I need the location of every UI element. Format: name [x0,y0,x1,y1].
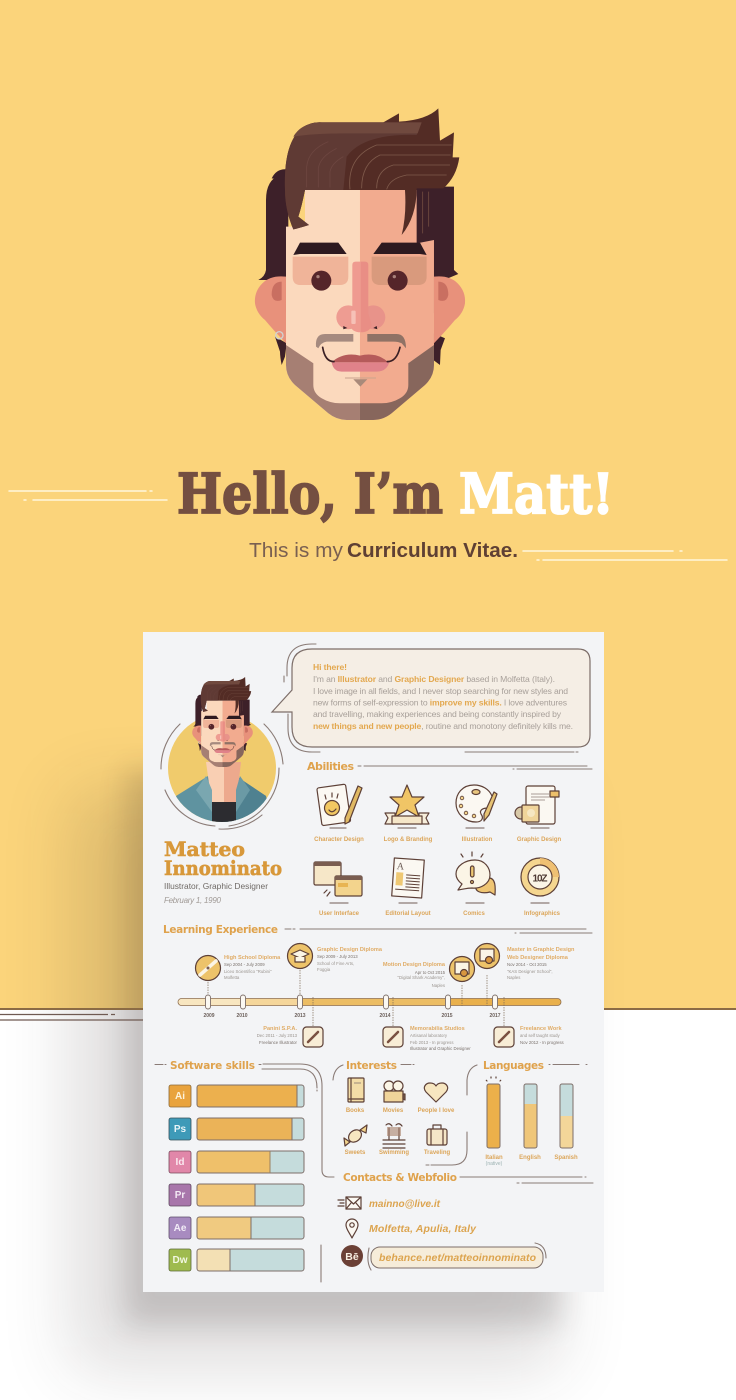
languages frame lines [467,1064,587,1095]
subtitle: Curriculum Vitae. [347,540,518,562]
skill: Pr [169,1184,304,1206]
icon: illustration palette [456,785,497,828]
icon: logo and branding [385,785,429,828]
milestone: motion design diploma: Motion Design Diploma [383,962,446,968]
skill: Ai: Ai [175,1091,185,1102]
job: Freelance Work: and self taught study [520,1033,561,1038]
icon: infographics donut [521,858,559,903]
bubble text: Hi there! [313,662,347,672]
heading: Contacts & Webfolio: Contacts & Webfolio [343,1172,457,1184]
panel: interests [333,1060,467,1165]
timeline years: 2013 [294,1013,306,1019]
heading: Interests: Interests [346,1060,397,1072]
skill: Ai [169,1085,304,1107]
icon: editorial layout [392,858,424,903]
email address: mainno@live.it [369,1199,441,1210]
heading: Software skills: Software skills [170,1060,255,1072]
skill: Ae [169,1217,304,1239]
icon: swimming [383,1124,405,1148]
icon: user interface [314,862,362,903]
job: Freelance Work: Nov 2012 - In progress [520,1040,564,1045]
icon: behance [341,1245,363,1267]
skill: Ps [169,1118,304,1140]
label: logo and branding: Logo & Branding [384,837,433,843]
timeline years: 2014 [379,1013,391,1019]
job: Memorabilia Studios: Memorabilia Studios [410,1026,465,1032]
job: Memorabilia Studios [383,1026,471,1051]
milestone: motion design diploma: Naples [432,983,445,988]
heading: Abilities: Abilities [307,760,354,773]
interests frame lines [333,1064,467,1165]
label: infographics: Infographics [524,911,561,917]
panel: software skills [155,1060,334,1282]
icon: traveling suitcase [427,1125,447,1145]
language: Italian: (native) [486,1161,503,1167]
milestone: graphic design diploma: School of Fine Arts, [317,961,354,966]
milestone: graphic design diploma: Sep 2009 - July 2013 [317,954,358,959]
job: Panini S.P.A.: Freelance Illustrator [259,1040,298,1045]
name: Matteo [164,837,245,861]
heading: Learning Experience: Learning Experience [163,924,278,936]
milestone: master in graphic design: "KAS Designer School", [507,969,553,974]
job: Memorabilia Studios: Artisanal laboratory [410,1033,448,1038]
job: Panini S.P.A. [257,1026,323,1047]
icon: sweets [344,1125,367,1146]
bubble text: new things and new people, routine and monotony definitely kills me. [313,721,573,731]
subtitle [249,540,518,562]
timeline [178,944,575,1051]
milestone: motion design diploma: "Digital Shark Academy", [398,975,445,980]
label: movies: Movies [383,1108,404,1114]
behance link pill: behance.net/matteoinnominato [379,1252,537,1264]
timeline years: 2010 [236,1013,248,1019]
timeline years: 2015 [441,1013,453,1019]
panel: contacts and webfolio [338,1172,593,1270]
avatar [161,677,283,830]
milestone: master in graphic design: Naples [507,975,520,980]
icon: editorial layout: A [396,861,405,873]
heading: Learning Experience [163,924,592,936]
language: English: English [519,1155,541,1161]
milestone: high school diploma [196,955,281,980]
milestone: graphic design diploma [288,944,383,972]
decorative title lines left [9,491,167,500]
heading: Abilities [307,760,592,773]
name [164,837,282,880]
icon: email [338,1197,361,1209]
job: Panini S.P.A.: Dec 2011 - July 2013 [257,1033,298,1038]
timeline bar [178,970,561,1040]
behance link pill [368,1243,546,1270]
speech bubble [272,644,590,752]
job: Memorabilia Studios: Feb 2013 - In progress [410,1040,453,1045]
title: Matt! [459,461,614,526]
label: books: Books [346,1108,365,1114]
language: Spanish: Spanish [554,1155,578,1161]
name: Innominato [164,856,282,880]
bubble text: and travelling, making experiences and being constantly inspired by [313,709,562,719]
skill: Id: Id [176,1157,184,1168]
label: sweets: Sweets [345,1150,366,1156]
skill: Id [169,1151,304,1173]
title: Hello, I’m [177,461,443,526]
bubble text: I love image in all fields, and I never stop searching for new styles and [313,686,568,696]
milestone: motion design diploma: Apr to Oct 2015 [415,970,446,975]
portrait: large flat illustrated face [255,108,465,420]
label: illustration: Illustration [462,837,493,843]
background: white lower area [0,1009,736,1400]
skill: Ps: Ps [174,1124,187,1135]
milestone: high school diploma: Molfetta [224,975,240,980]
address: Molfetta, Apulia, Italy [369,1223,477,1235]
avatar body [176,762,266,822]
milestone: graphic design diploma: Graphic Design Diploma [317,947,383,953]
resume sheet [143,632,604,1292]
language: Italian: Italian [485,1155,503,1161]
label: traveling: Traveling [424,1150,451,1156]
skill: Dw [169,1249,304,1271]
paper drop shadow: wide soft layer [70,790,560,1370]
icon: movies [384,1081,405,1102]
label: comics: Comics [463,911,485,917]
timeline years: 2017 [489,1013,501,1019]
bubble text [313,662,573,731]
subtitle: This is my [249,540,343,562]
contacts divider lines [460,1177,593,1183]
milestone: master in graphic design: Nov 2014 - Oct 2015 [507,962,547,967]
job: Panini S.P.A.: Panini S.P.A. [263,1026,297,1032]
horizon rule [0,1008,736,1020]
milestone: master in graphic design [474,944,575,980]
skill: Pr: Pr [175,1190,185,1201]
paper drop shadow: tight layer [125,770,560,1325]
job: Freelance Work [494,1026,564,1047]
label: people I love: People I love [418,1108,455,1114]
section connector lines [155,1064,334,1282]
job title: Illustrator, Graphic Designer [164,881,268,891]
panel: languages [467,1060,587,1167]
label: character design: Character Design [314,837,364,843]
label: user interface: User Interface [319,911,360,917]
job: Memorabilia Studios: Illustrator and Graphic Designer [410,1046,471,1051]
icon: location pin [346,1219,358,1238]
icon: infographics donut: 10Z [532,874,548,884]
icon: books [348,1078,364,1102]
skill: Ae: Ae [174,1223,187,1234]
skill: Dw: Dw [172,1255,188,1266]
job: Freelance Work: Freelance Work [520,1026,562,1032]
heading: Languages: Languages [483,1060,544,1072]
label: editorial layout: Editorial Layout [385,911,431,917]
bubble text: I'm an Illustrator and Graphic Designer based in Molfetta (Italy). [313,674,555,684]
background: yellow upper area [0,0,736,1009]
label: graphic design: Graphic Design [517,837,562,843]
icon: graphic design [515,786,559,828]
bubble text: new forms of self-expression to improve my skills. I love adventures [313,698,567,708]
icon: character design [317,784,362,828]
label: swimming: Swimming [379,1150,409,1156]
birth date: February 1, 1990 [164,896,222,905]
timeline years: 2009 [203,1013,215,1019]
icon: behance: Bē [345,1251,359,1263]
decorative subtitle lines right [523,551,727,560]
language: Italian [485,1077,503,1167]
icon: comics [456,852,495,903]
milestone: high school diploma: High School Diploma [224,955,281,961]
milestone: high school diploma: Liceo Scientifico "Rubini" [224,969,272,974]
milestone: graphic design diploma: Foggia [317,967,331,972]
icon: heart [424,1083,448,1102]
milestone: master in graphic design: Web Designer Diploma [507,955,569,961]
milestone: motion design diploma [383,956,474,988]
milestone: master in graphic design: Master in Graphic Design [507,947,575,953]
timeline years [203,1013,501,1019]
milestone: high school diploma: Sep 2004 - July 2009 [224,962,265,967]
